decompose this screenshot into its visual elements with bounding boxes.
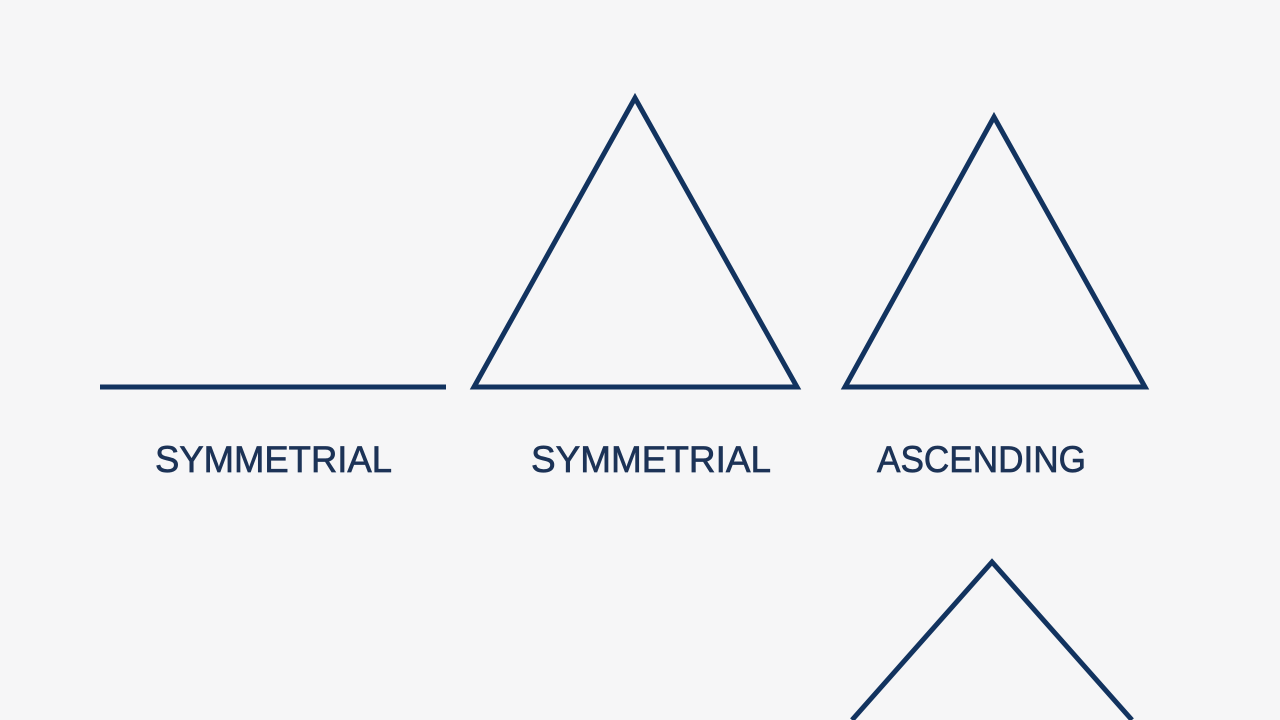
triangle: symmetrial bbox=[474, 98, 797, 387]
triangle: ascending bbox=[845, 117, 1145, 387]
label: symmetrial left: SYMMETRIAL bbox=[155, 439, 392, 480]
label: symmetrial centre: SYMMETRIAL bbox=[531, 439, 771, 480]
label: ascending: ASCENDING bbox=[877, 439, 1086, 480]
triangle: lower partial bbox=[852, 562, 1132, 720]
line: flat symmetrial bbox=[100, 384, 446, 390]
